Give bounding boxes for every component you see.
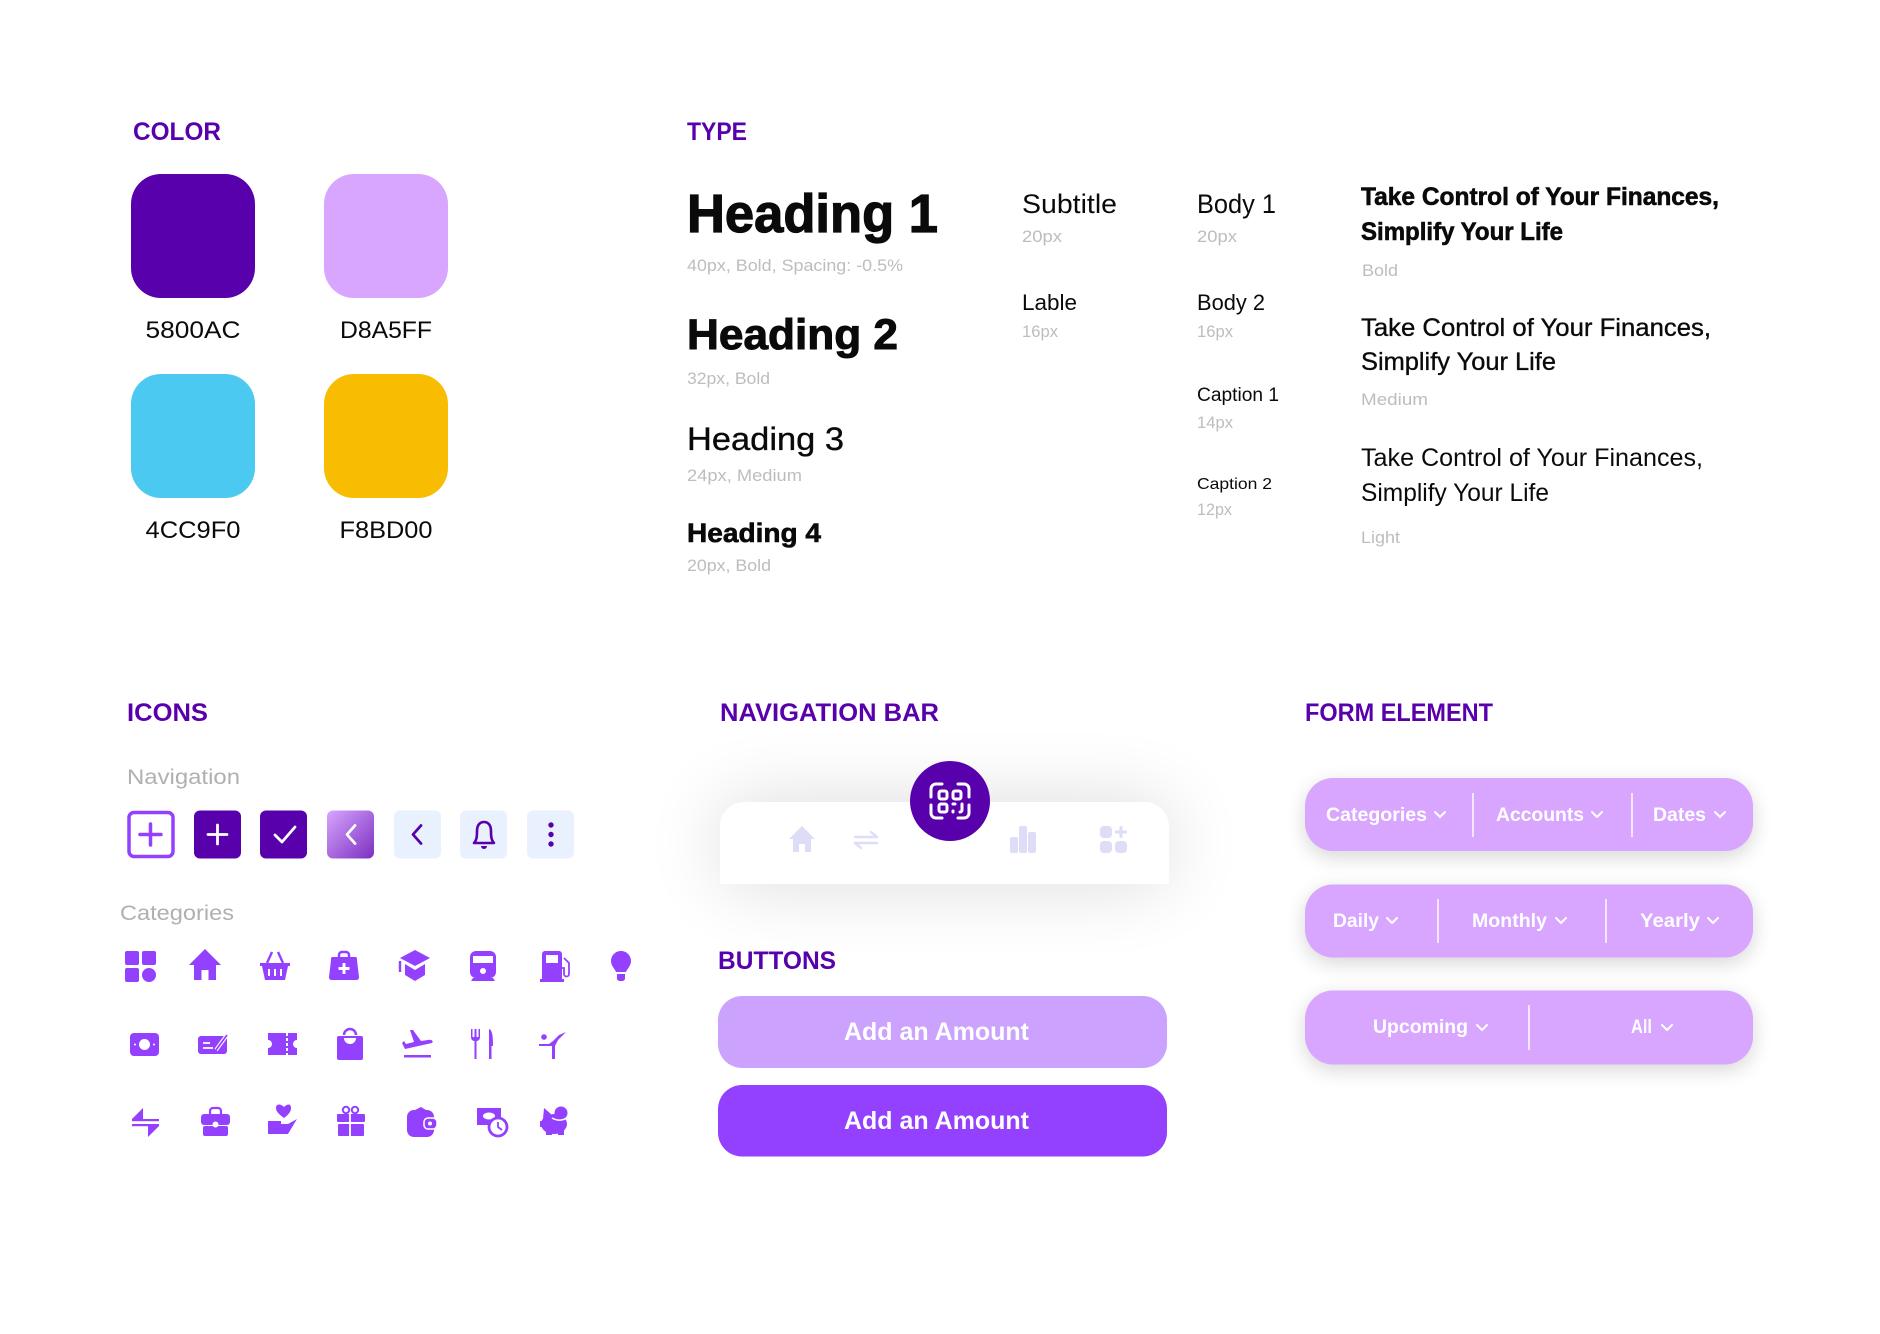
icon: transfer bbox=[132, 1108, 159, 1137]
text: bold sentence: Take Control of Your Finances, bbox=[1361, 183, 1719, 211]
text: heading 2 sample: Heading 2 bbox=[687, 311, 898, 359]
text: light sentence: Simplify Your Life bbox=[1361, 479, 1549, 507]
text: subtitle sample bbox=[1022, 189, 1117, 246]
text: heading 1 sample: 40px, Bold, Spacing: -0.5% bbox=[687, 256, 903, 275]
swatch: 4CC9F0: 4CC9F0 bbox=[146, 517, 240, 544]
text: caption 2 sample: 12px bbox=[1197, 500, 1232, 519]
panel: type bbox=[687, 118, 1719, 575]
text: label sample bbox=[1022, 290, 1077, 341]
heading: icons: ICONS bbox=[127, 699, 208, 727]
dropdown: daily monthly yearly: Daily bbox=[1333, 911, 1379, 932]
icon: piggy bank bbox=[540, 1106, 568, 1135]
icon group: categories bbox=[125, 949, 631, 1137]
icon: check bbox=[260, 810, 307, 858]
nav bar shadow bbox=[720, 802, 1169, 884]
heading: form element: FORM ELEMENT bbox=[1305, 699, 1493, 727]
text: medium sentence: Simplify Your Life bbox=[1361, 348, 1556, 376]
icon: grid bbox=[125, 951, 156, 982]
icon: light bulb bbox=[611, 951, 631, 981]
panel: color bbox=[131, 118, 448, 544]
text: label sample: 16px bbox=[1022, 322, 1058, 341]
text: medium sentence: Take Control of Your Finances, bbox=[1361, 314, 1711, 342]
text: heading 1 sample: Heading 1 bbox=[687, 184, 938, 244]
text: body 2 sample: Body 2 bbox=[1197, 290, 1265, 315]
text: body 1 sample bbox=[1197, 189, 1276, 246]
dropdown: categories accounts dates: Dates bbox=[1653, 805, 1706, 826]
panel: form element bbox=[1305, 699, 1753, 1070]
text: subtitle sample: 20px bbox=[1022, 227, 1063, 246]
label: navigation: Navigation bbox=[127, 766, 240, 789]
dropdown: categories accounts dates bbox=[1305, 778, 1753, 857]
dropdown: daily monthly yearly bbox=[1305, 884, 1753, 963]
swatch: 5800AC bbox=[131, 174, 255, 344]
panel: navigation bar bbox=[720, 699, 1169, 884]
label: categories: Categories bbox=[120, 902, 234, 925]
nav bar body bbox=[720, 802, 1169, 884]
text: subtitle sample: Subtitle bbox=[1022, 189, 1117, 219]
text: label sample: Lable bbox=[1022, 290, 1077, 315]
text: heading 4 sample bbox=[687, 518, 821, 575]
panel: buttons bbox=[718, 947, 1167, 1156]
panel: icons bbox=[120, 699, 631, 1137]
icon: filled plus bbox=[194, 810, 241, 858]
icon: graduation cap bbox=[400, 950, 430, 981]
swatch: F8BD00: F8BD00 bbox=[340, 517, 432, 544]
icon: qr scan button bbox=[910, 761, 990, 841]
text: caption 2 sample bbox=[1197, 476, 1272, 519]
text: body 1 sample: Body 1 bbox=[1197, 189, 1276, 219]
icon: home bbox=[189, 949, 221, 980]
button: disabled bbox=[718, 996, 1167, 1068]
swatch: 4CC9F0 bbox=[131, 374, 255, 544]
icon: shopping bag bbox=[337, 1029, 363, 1060]
text: heading 2 sample bbox=[687, 311, 898, 388]
swatch: F8BD00 bbox=[324, 374, 448, 544]
text: heading 3 sample bbox=[687, 421, 844, 485]
dropdown: daily monthly yearly: Yearly bbox=[1640, 911, 1700, 932]
text: bold sentence: Simplify Your Life bbox=[1361, 218, 1563, 246]
swatch: 5800AC: 5800AC bbox=[146, 317, 240, 344]
heading: navigation bar: NAVIGATION BAR bbox=[720, 699, 939, 727]
heading: buttons: BUTTONS bbox=[718, 947, 836, 975]
icon: briefcase bbox=[201, 1108, 230, 1136]
text: caption 1 sample bbox=[1197, 385, 1279, 432]
text: light sentence: Light bbox=[1361, 528, 1400, 547]
icon: nav home bbox=[789, 826, 815, 852]
icon: nav apps bbox=[1100, 826, 1127, 853]
heading: color: COLOR bbox=[133, 118, 221, 146]
dropdown: upcoming all: All bbox=[1631, 1017, 1652, 1038]
icon: dancer bbox=[539, 1032, 566, 1059]
icon: hand heart bbox=[268, 1104, 297, 1134]
text: heading 4 sample: 20px, Bold bbox=[687, 556, 771, 575]
icon: nav chart bbox=[1010, 826, 1036, 853]
icon: cash bbox=[130, 1033, 159, 1056]
text: heading 3 sample: Heading 3 bbox=[687, 421, 844, 457]
icon: light back bbox=[394, 810, 441, 858]
text: medium sentence bbox=[1361, 314, 1711, 409]
text: light sentence: Take Control of Your Finances, bbox=[1361, 444, 1703, 472]
text: caption 2 sample: Caption 2 bbox=[1197, 476, 1272, 493]
dropdown: categories accounts dates: Categories bbox=[1326, 805, 1427, 826]
text: heading 3 sample: 24px, Medium bbox=[687, 466, 802, 485]
swatch: D8A5FF bbox=[324, 174, 448, 344]
dropdown: daily monthly yearly: Monthly bbox=[1472, 911, 1547, 932]
button: active bbox=[718, 1085, 1167, 1156]
swatch: D8A5FF: D8A5FF bbox=[340, 317, 432, 344]
text: body 2 sample bbox=[1197, 290, 1265, 341]
icon: ticket bbox=[268, 1033, 297, 1055]
text: caption 1 sample: 14px bbox=[1197, 413, 1233, 432]
icon: train bbox=[470, 951, 496, 981]
text: body 1 sample: 20px bbox=[1197, 227, 1238, 246]
heading: type: TYPE bbox=[687, 118, 747, 146]
button: disabled: Add an Amount bbox=[844, 1018, 1030, 1046]
text: heading 1 sample bbox=[687, 184, 938, 275]
icon: gradient back bbox=[327, 810, 374, 858]
icon: bill clock bbox=[477, 1108, 507, 1136]
icon: medical bag bbox=[329, 952, 359, 980]
icon: fuel pump bbox=[540, 951, 569, 982]
icon: gift bbox=[337, 1107, 365, 1136]
icon: basket bbox=[260, 952, 290, 980]
icon: cheque bbox=[198, 1035, 227, 1054]
text: body 2 sample: 16px bbox=[1197, 322, 1233, 341]
text: medium sentence: Medium bbox=[1361, 390, 1428, 409]
icon: nav transfer bbox=[855, 832, 877, 848]
text: light sentence bbox=[1361, 444, 1703, 547]
icon: more dots bbox=[527, 810, 574, 858]
icon: plane take off bbox=[402, 1030, 433, 1058]
dropdown: upcoming all bbox=[1305, 990, 1753, 1070]
dropdown: upcoming all: Upcoming bbox=[1373, 1017, 1468, 1038]
button: active: Add an Amount bbox=[844, 1107, 1030, 1135]
dropdown: categories accounts dates: Accounts bbox=[1496, 805, 1584, 826]
icon: cutlery bbox=[471, 1029, 493, 1059]
text: caption 1 sample: Caption 1 bbox=[1197, 385, 1279, 406]
icon: bell bbox=[460, 810, 507, 858]
text: heading 4 sample: Heading 4 bbox=[687, 518, 821, 548]
icon: wallet bbox=[407, 1107, 437, 1137]
text: heading 2 sample: 32px, Bold bbox=[687, 369, 770, 388]
text: bold sentence bbox=[1361, 183, 1719, 280]
text: bold sentence: Bold bbox=[1362, 261, 1398, 280]
icon: outlined plus bbox=[129, 812, 173, 856]
